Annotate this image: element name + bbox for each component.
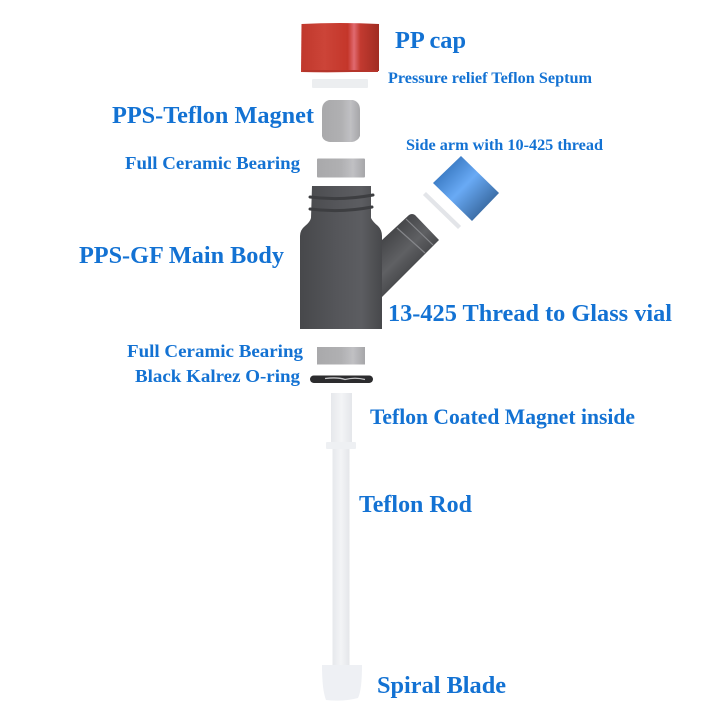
- label: Teflon Rod: Teflon Rod: [359, 492, 473, 518]
- icon: Teflon rod with magnet and spiral blade: [322, 393, 362, 701]
- label: PP cap: PP cap: [395, 28, 466, 54]
- icon: lower ceramic bearing: [317, 347, 365, 364]
- icon: side arm septum: [424, 193, 460, 228]
- label: Side arm with 10-425 thread: Side arm with 10-425 thread: [406, 137, 603, 154]
- icon: PPS-GF main body: [300, 186, 382, 329]
- label: Teflon Coated Magnet inside: Teflon Coated Magnet inside: [370, 404, 635, 429]
- icon: PPS-Teflon magnet: [322, 100, 360, 142]
- icon: side arm thread: [382, 214, 439, 297]
- label: Spiral Blade: Spiral Blade: [377, 673, 506, 699]
- icon: blue side arm cap: [433, 156, 499, 221]
- icon: red PP cap: [301, 23, 379, 72]
- label: PPS-GF Main Body: PPS-GF Main Body: [79, 243, 284, 269]
- label: Pressure relief Teflon Septum: Pressure relief Teflon Septum: [388, 70, 593, 87]
- icon: pressure relief septum: [312, 79, 368, 88]
- icon: upper ceramic bearing: [317, 158, 365, 178]
- icon: black Kalrez O-ring: [310, 376, 373, 383]
- label: Black Kalrez O-ring: Black Kalrez O-ring: [135, 366, 300, 386]
- label: 13-425 Thread to Glass vial: 13-425 Thread to Glass vial: [388, 301, 672, 327]
- label: Full Ceramic Bearing lower: Full Ceramic Bearing: [127, 341, 303, 361]
- label: PPS-Teflon Magnet: PPS-Teflon Magnet: [112, 103, 314, 129]
- label: Full Ceramic Bearing upper: Full Ceramic Bearing: [125, 153, 300, 173]
